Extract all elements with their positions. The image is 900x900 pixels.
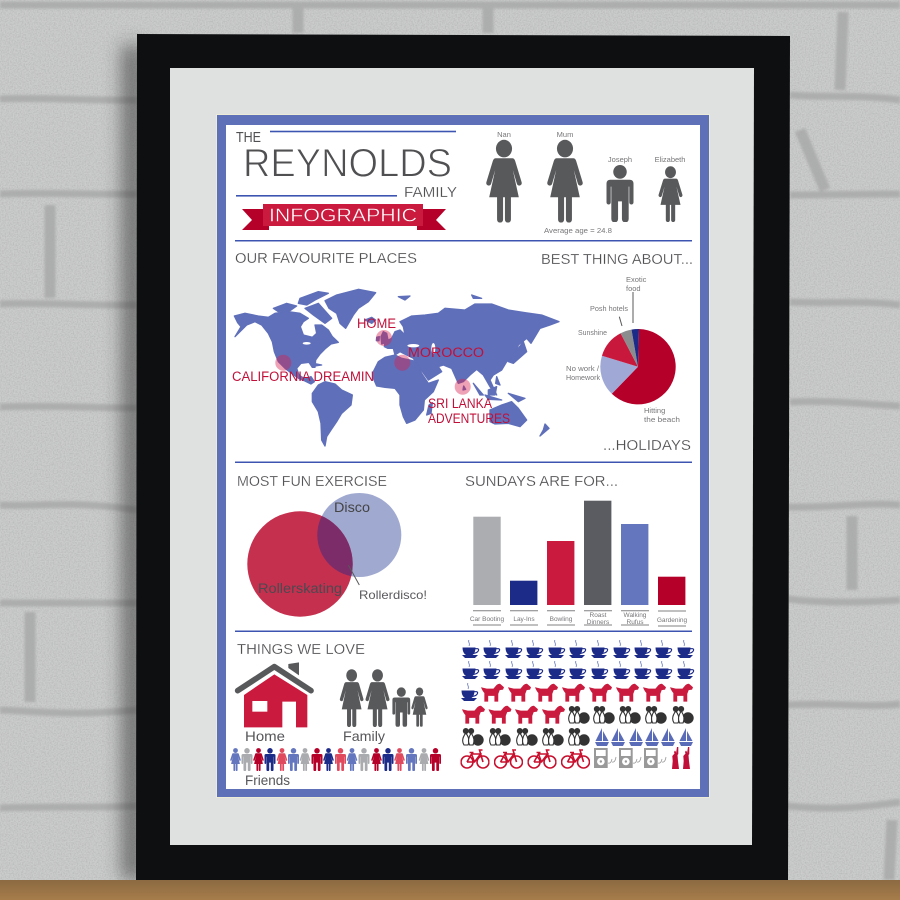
family names [497, 130, 685, 164]
pie chart: holidays: Sunshine [578, 328, 607, 337]
world map [234, 289, 559, 446]
heading: best thing about: BEST THING ABOUT... [541, 251, 693, 268]
map labels: HOME [357, 316, 396, 331]
bar chart: Sundays: Bowling [550, 616, 573, 623]
family names: Mum [557, 130, 573, 139]
cream mat board [170, 68, 754, 845]
bar chart: Sundays: Walking [624, 612, 647, 619]
poster [216, 114, 710, 798]
title: family: FAMILY [404, 184, 457, 201]
heading: holidays: ...HOLIDAYS [603, 437, 691, 454]
venn diagram: Disco [334, 500, 370, 515]
label: friends: Friends [245, 772, 290, 788]
icons: sailing boats [595, 728, 693, 746]
heading: sundays: SUNDAYS ARE FOR... [465, 473, 618, 490]
map labels [232, 316, 510, 426]
average age: Average age = 24.8 [544, 226, 612, 235]
icons: music players [594, 748, 666, 768]
venn diagram: Rollerdisco! [359, 588, 427, 602]
icon: family [340, 669, 428, 727]
pie chart: holidays [566, 275, 680, 424]
map labels: CALIFORNIA DREAMIN [232, 369, 374, 384]
bar chart: Sundays: Dinners [587, 619, 610, 626]
venn diagram: Rollerskating [258, 581, 342, 596]
person: Mum [547, 140, 583, 223]
ribbon banner [242, 204, 446, 230]
family members [486, 130, 685, 235]
icons: bowling [463, 706, 694, 746]
pie chart: holidays: No work / [566, 364, 600, 373]
pie chart: holidays: Exotic [626, 275, 647, 284]
title block [236, 130, 457, 230]
venn diagram [247, 493, 427, 617]
black picture frame [136, 34, 790, 880]
family names: Joseph [608, 155, 632, 164]
wooden shelf [0, 880, 900, 900]
pie chart: holidays: Posh hotels [590, 304, 628, 313]
icons: tea cups [461, 640, 694, 701]
bar chart: Sundays: Car Booting [470, 616, 505, 623]
heading: favourite places: OUR FAVOURITE PLACES [235, 250, 417, 267]
bar chart: Sundays: Gardening [657, 617, 688, 624]
bar chart: Sundays: Lay-Ins [513, 616, 535, 623]
icons: statues of liberty [672, 747, 690, 769]
map labels: MOROCCO [408, 345, 484, 360]
map labels: SRI LANKA [428, 396, 492, 411]
bar chart: Sundays [470, 501, 688, 626]
icons: bicycles [461, 750, 590, 768]
person: Nan [486, 140, 522, 223]
family names: Elizabeth [655, 155, 685, 164]
title: Reynolds: REYNOLDS [243, 142, 452, 186]
family names: Nan [497, 130, 511, 139]
pie chart: holidays: the beach [644, 415, 680, 424]
label: home: Home [245, 728, 285, 744]
map labels: ADVENTURES [428, 411, 510, 426]
icon: home [238, 662, 311, 727]
pie chart: holidays: Hitting [644, 406, 665, 415]
map markers [275, 330, 471, 395]
ribbon banner: INFOGRAPHIC [269, 204, 417, 226]
bar chart: Sundays: Rufus [627, 619, 644, 626]
icons: friends row [230, 748, 441, 771]
person: Elizabeth [659, 166, 682, 222]
heading: things we love: THINGS WE LOVE [237, 641, 365, 658]
heading: exercise: MOST FUN EXERCISE [237, 473, 387, 490]
icons: dogs [462, 684, 693, 724]
person: Joseph [606, 165, 634, 222]
pie chart: holidays: food [626, 284, 641, 293]
bar chart: Sundays: Roast [590, 612, 607, 619]
pie chart: holidays: Homework [566, 373, 600, 382]
label: family: Family [343, 728, 385, 744]
title: the: THE [236, 130, 261, 146]
